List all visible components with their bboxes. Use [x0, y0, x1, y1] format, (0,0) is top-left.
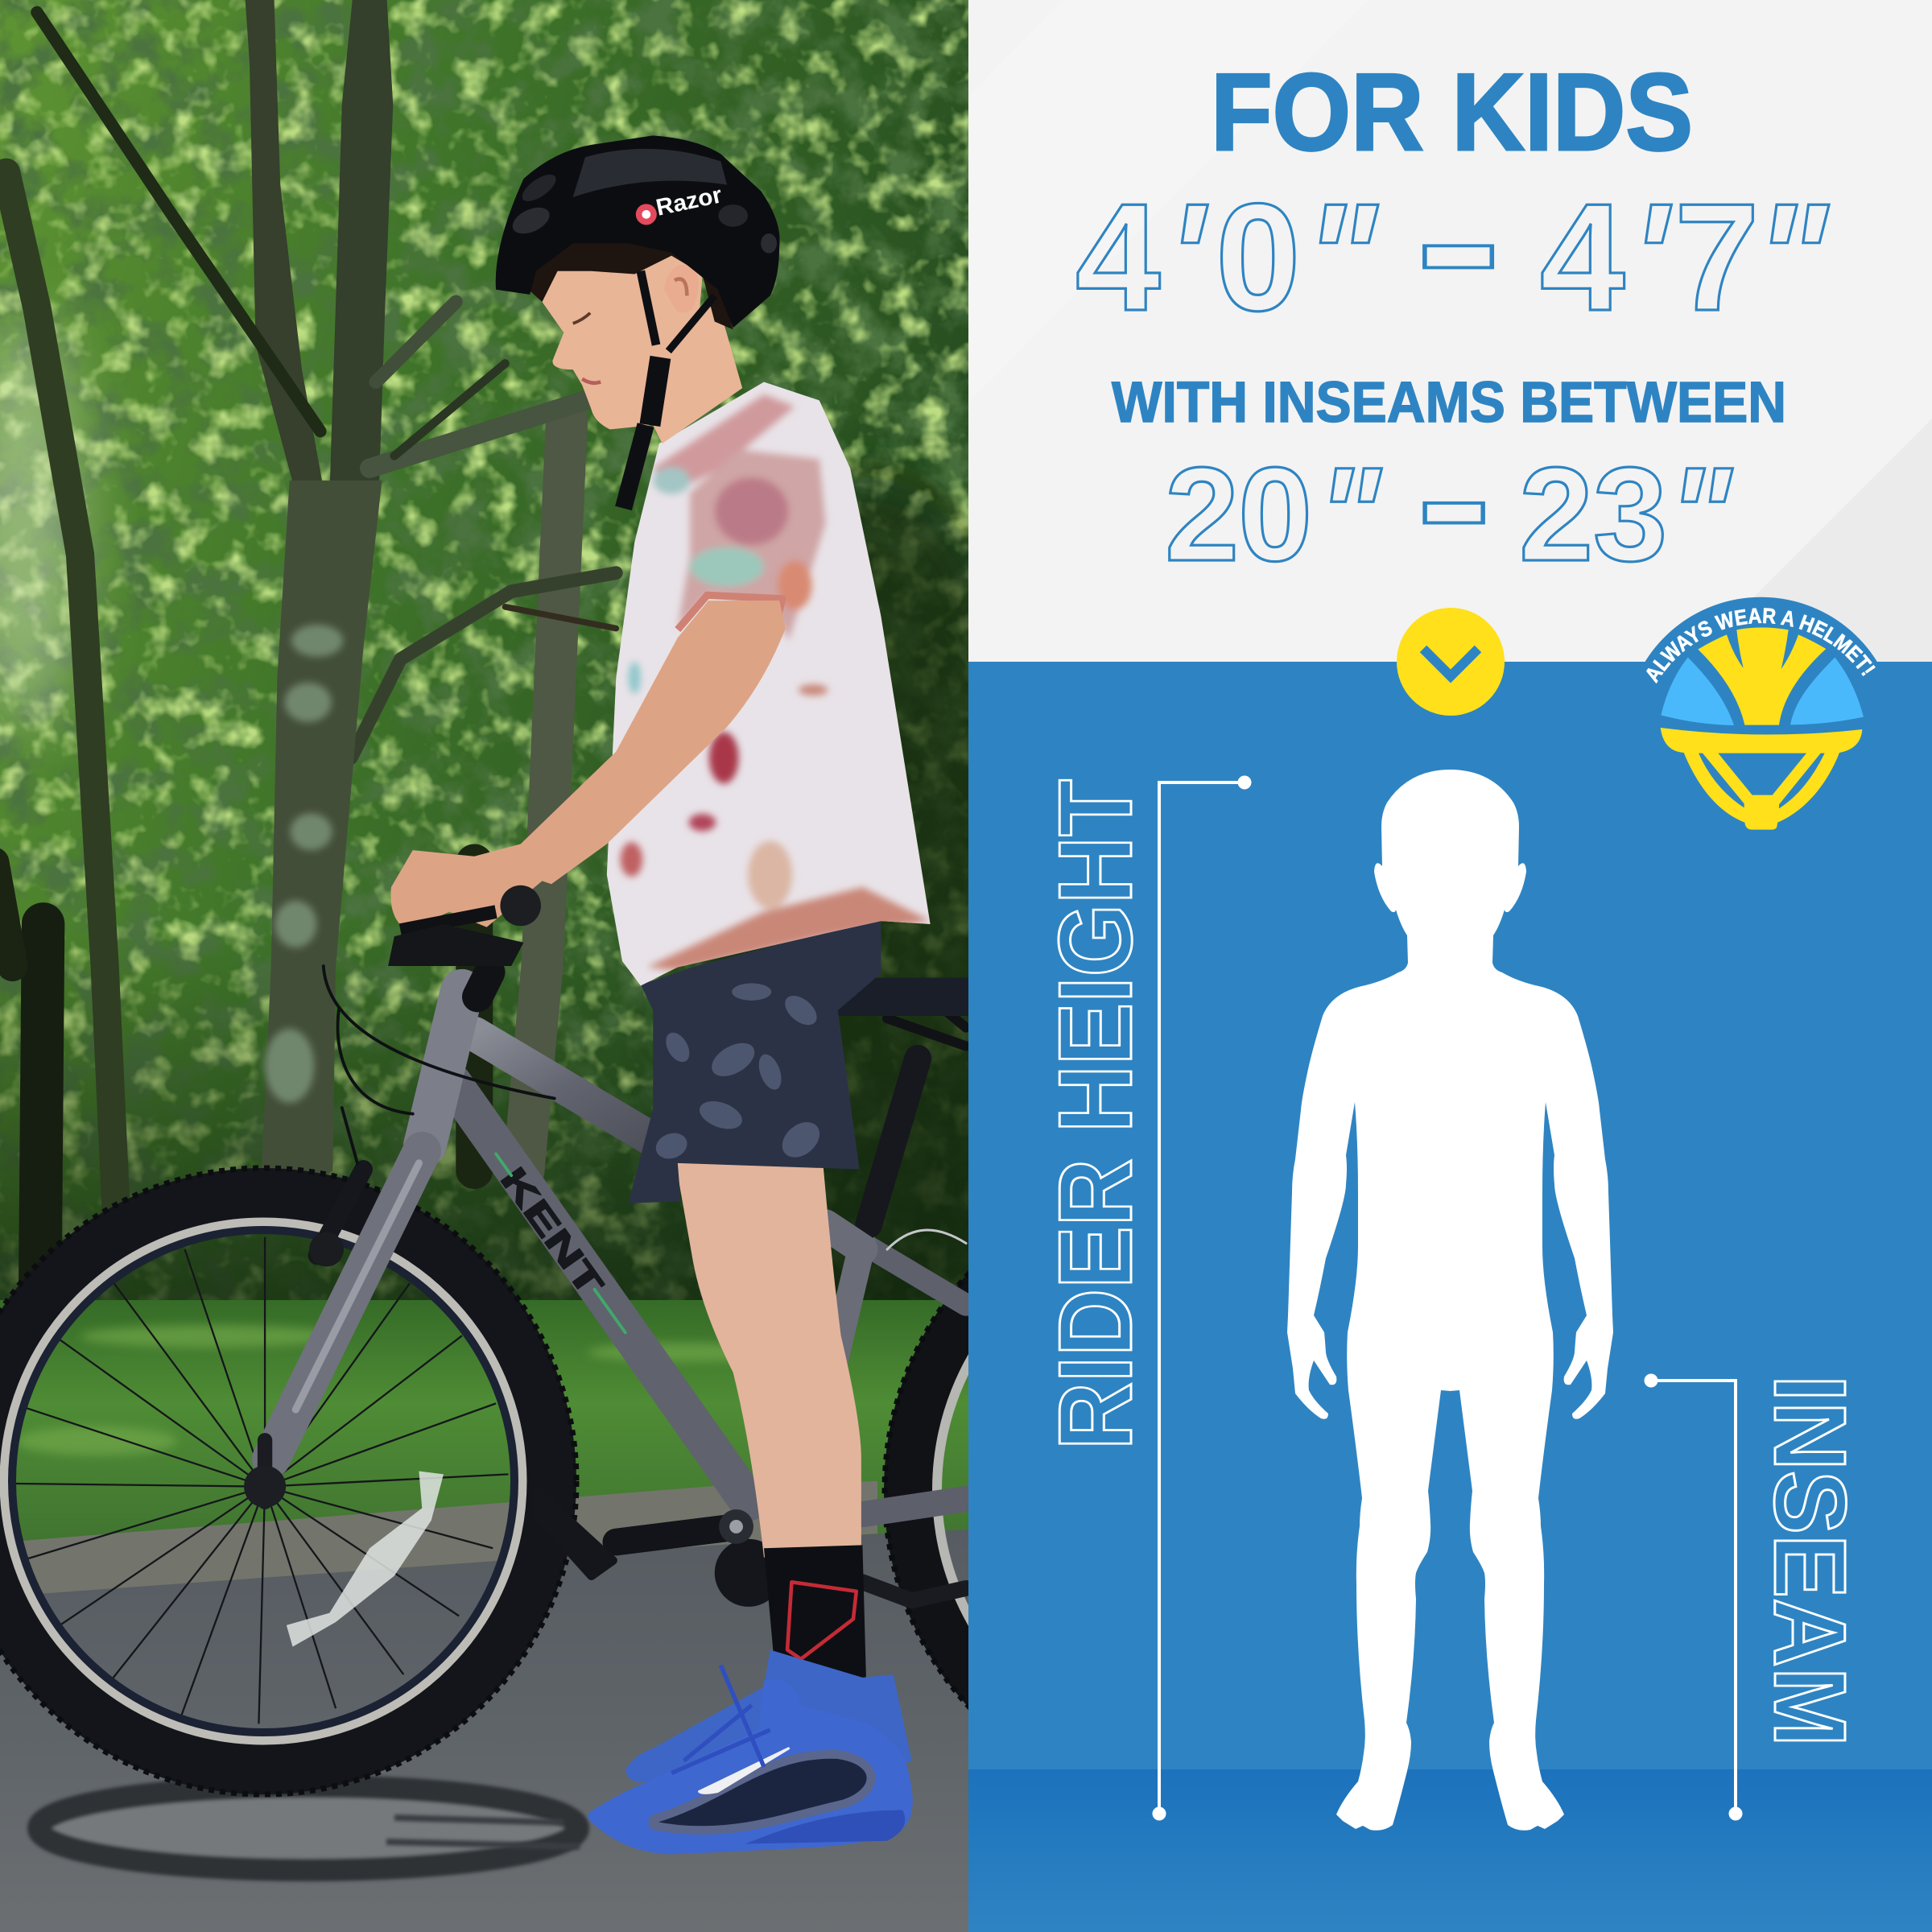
rider height range: ": [1755, 172, 1830, 343]
icon: always wear a helmet badge: [1645, 597, 1877, 830]
inseam range: -: [1416, 405, 1492, 592]
rider height label: RIDER HEIGHT: [1038, 779, 1154, 1450]
front wheel: [0, 1168, 576, 1794]
inseam range: ": [1668, 440, 1733, 589]
boy: [388, 135, 931, 1855]
panel: blue silhouette panel: [968, 662, 1932, 1932]
grass: [0, 1300, 968, 1558]
neck and face: [536, 246, 742, 444]
tree trunks and branches: [0, 0, 616, 1294]
subheading: inseams: WITH INSEAMS BETWEEN: [1112, 371, 1786, 435]
inseam range: 2: [1519, 440, 1593, 589]
inseam range: [1165, 405, 1733, 592]
forest background: [0, 0, 968, 1300]
rider height range: [1075, 138, 1830, 343]
bicycle frame: [244, 966, 966, 1607]
inseam measure line: [1644, 1373, 1742, 1821]
shorts: [629, 918, 881, 1203]
hair: [529, 237, 733, 329]
leg: [675, 1157, 861, 1558]
rider height range: -: [1414, 138, 1502, 343]
helmet: Razor: [654, 182, 724, 221]
icon: yellow chevron badge: [1397, 608, 1505, 716]
ear and facial features: [573, 265, 699, 383]
shirt: [607, 382, 931, 985]
socks: [764, 1545, 868, 1727]
inseam range: 2: [1165, 440, 1239, 589]
rider height measure line: [1153, 776, 1251, 1821]
inseam label: INSEAM: [1753, 1375, 1867, 1747]
shoes: [588, 1649, 913, 1855]
tie-dye colour patches: [621, 394, 931, 970]
rider height range: 0: [1216, 172, 1301, 343]
badge text: ALWAYS WEAR A HELMET!: [1646, 608, 1876, 684]
frame text: KENT: [493, 1160, 610, 1303]
helmet: [496, 135, 780, 328]
reflector: [287, 1472, 444, 1647]
rider height range: ': [1631, 172, 1672, 343]
handlebar grip: [388, 886, 541, 966]
child silhouette: [1287, 770, 1613, 1831]
panel: top sizing panel: [968, 0, 1932, 662]
inseam range: 0: [1238, 440, 1312, 589]
helmet logo: [636, 204, 657, 225]
rider height range: 4: [1540, 172, 1625, 343]
shorts pattern: [652, 983, 827, 1165]
heading: for kids: FOR KIDS: [1211, 51, 1693, 173]
rider height range: 7: [1674, 172, 1760, 343]
photo: boy with bike: [0, 0, 968, 1932]
rider height range: ': [1167, 172, 1208, 343]
rider height range: 4: [1075, 172, 1161, 343]
wheel shadow on road: [39, 1786, 580, 1870]
curb: [12, 1481, 877, 1594]
rider height range: ": [1304, 172, 1379, 343]
sleeve hem: [678, 595, 782, 647]
chin strap: [623, 271, 715, 508]
arm: [390, 601, 786, 931]
inseam range: ": [1317, 440, 1382, 589]
spokes: [9, 1237, 508, 1724]
rear wheel: [885, 1170, 1525, 1810]
grass light patches: [16, 1325, 781, 1455]
inseam range: 3: [1593, 440, 1667, 589]
road: [0, 1530, 968, 1932]
